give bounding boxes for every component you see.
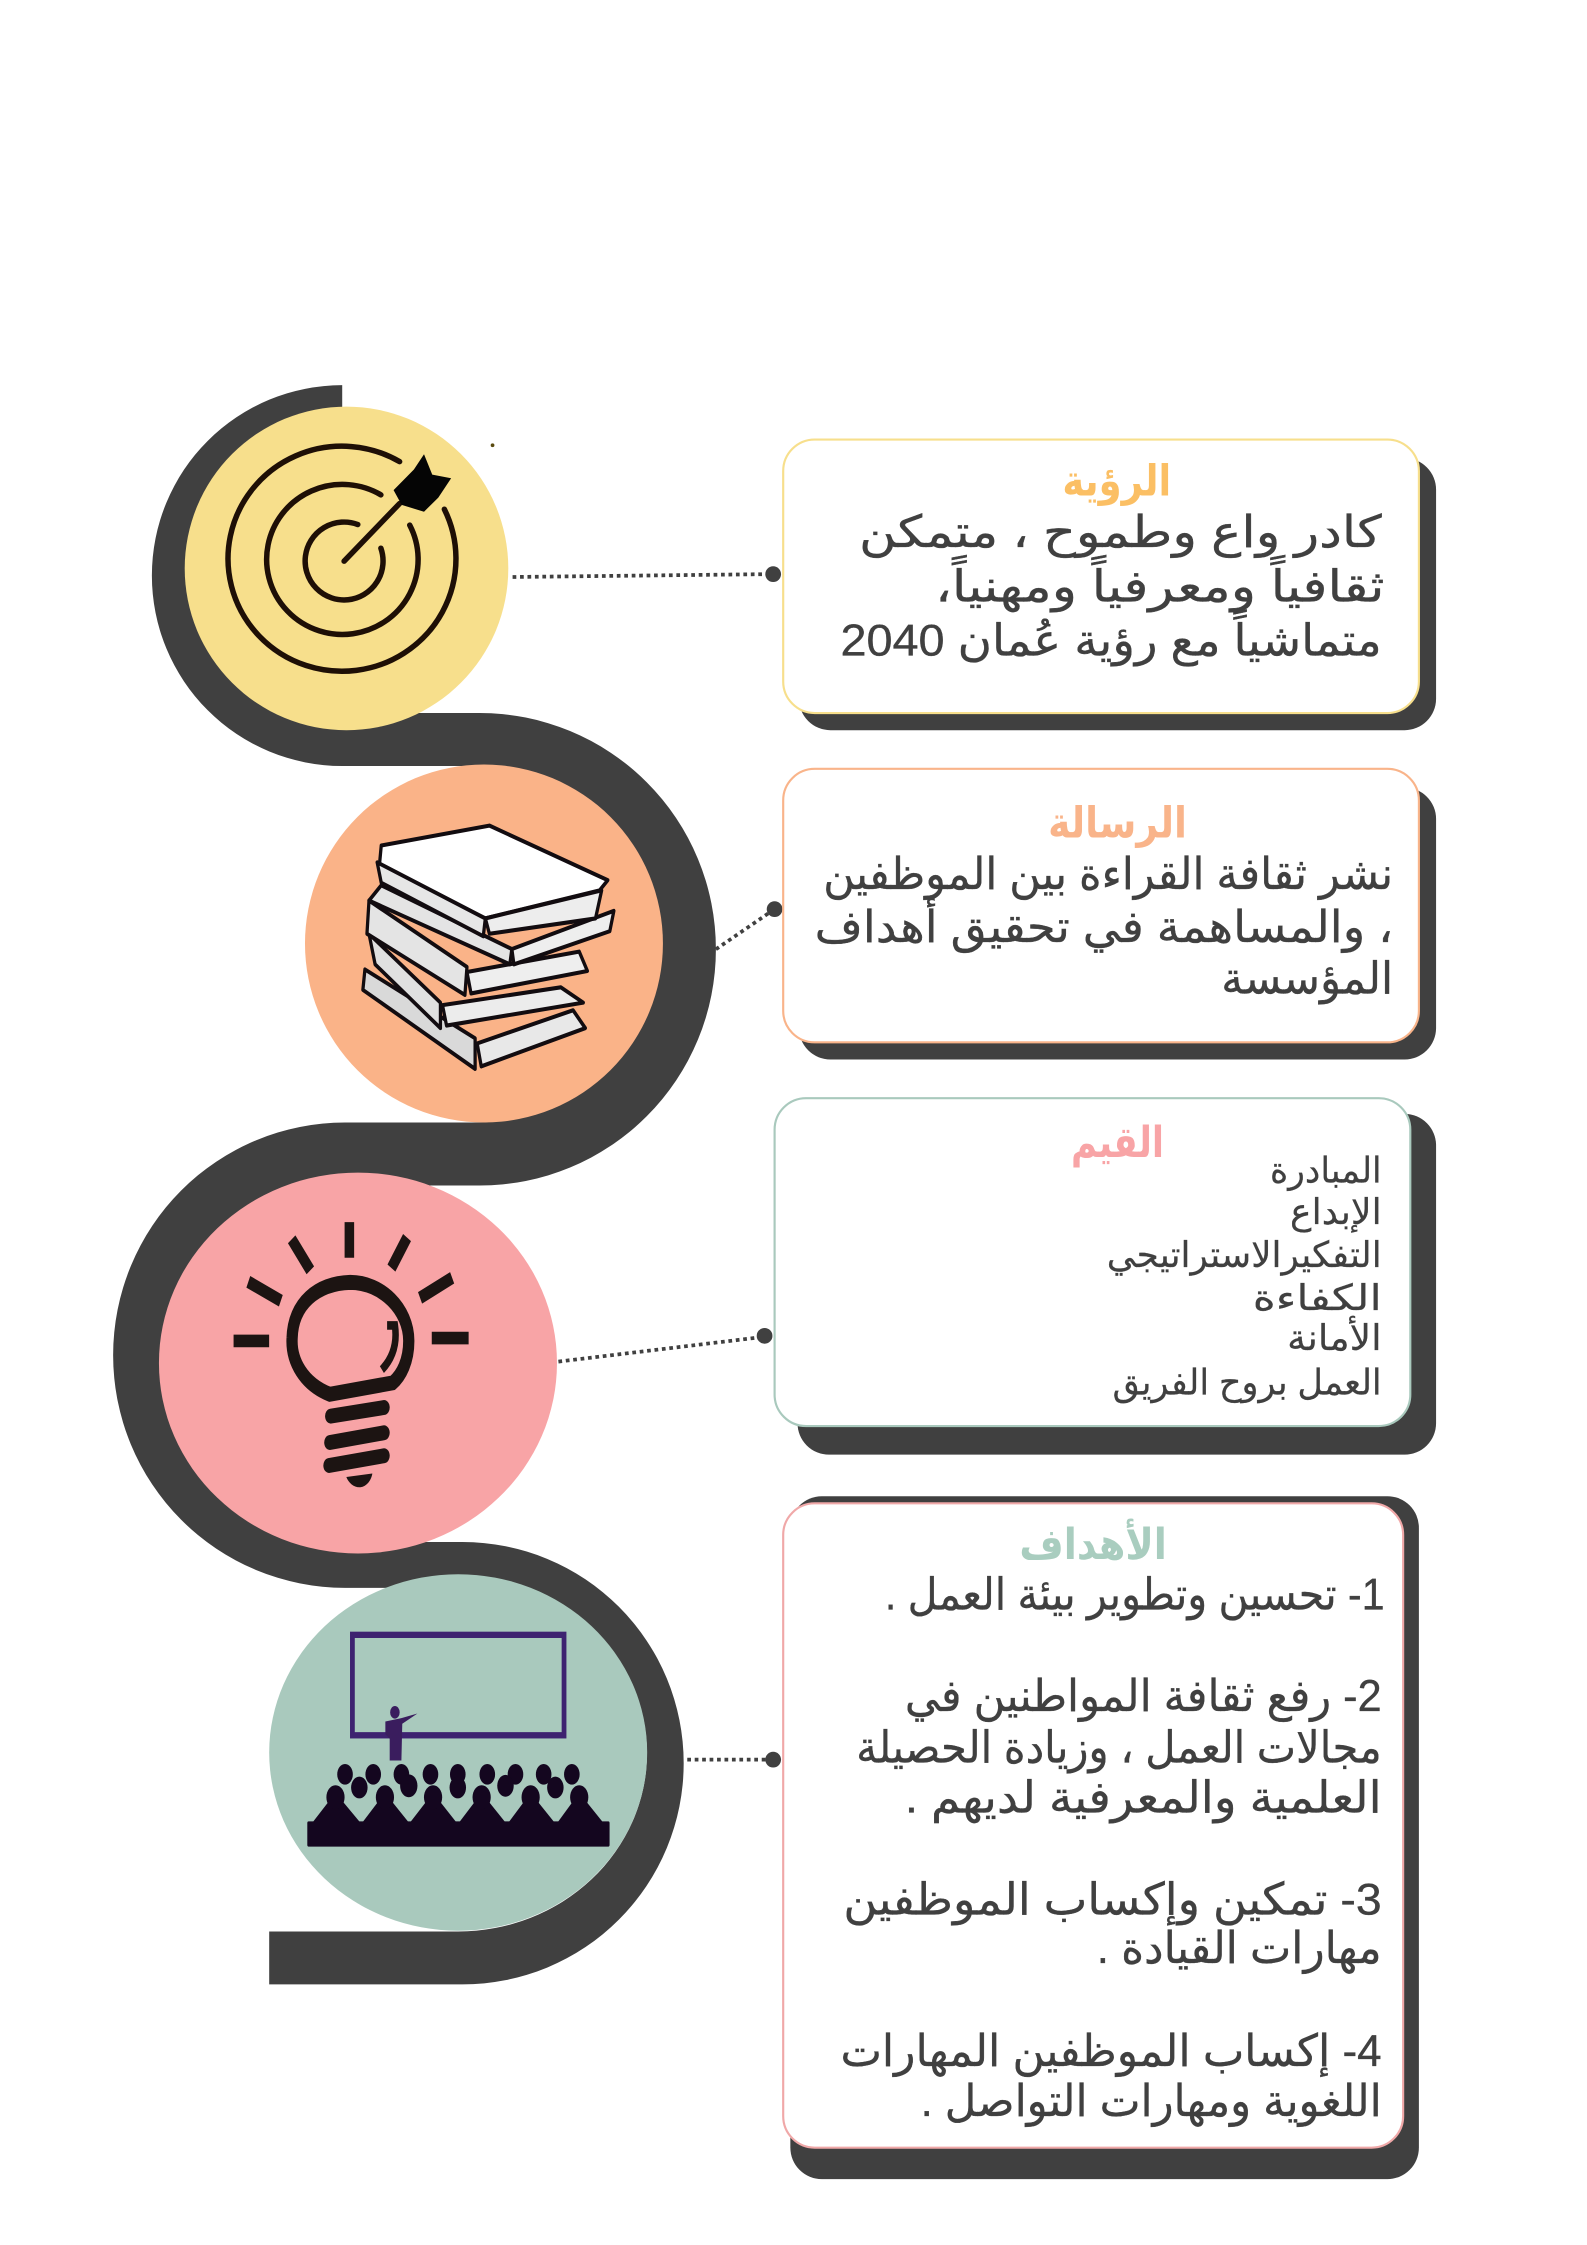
winding road band [113, 385, 716, 1984]
goals list [840, 1570, 1385, 2127]
mission text: ، والمساهمة في تحقيق أهداف [815, 897, 1393, 953]
vision text: ثقافياً ومعرفياً ومهنياً، [935, 555, 1385, 612]
goals list: 4- إكساب الموظفين المهارات [840, 2027, 1382, 2077]
panel: goals [783, 1496, 1419, 2179]
vision text: كادر واع وطموح ، متمكن [859, 508, 1383, 558]
values list [1107, 1151, 1382, 1404]
values list: الكفاءة [1253, 1278, 1382, 1318]
goals list: مجالات العمل ، وزيادة الحصيلة [856, 1723, 1382, 1773]
green circle with presentation icon [269, 1574, 647, 1931]
goals list: مهارات القيادة . [1097, 1924, 1382, 1974]
connector: values [558, 1328, 772, 1362]
heading: vision: الرؤية [1062, 457, 1171, 506]
mission text: نشر ثقافة القراءة بين الموظفين [823, 850, 1393, 900]
values list: الأمانة [1287, 1315, 1382, 1358]
pink circle with light bulb icon [159, 1173, 557, 1553]
values list: العمل بروح الفريق [1112, 1363, 1382, 1404]
panel: mission [783, 769, 1436, 1060]
values list: التفكيرالاستراتيجي [1107, 1235, 1382, 1276]
values list: الإبداع [1290, 1192, 1382, 1233]
vision text: متماشياً مع رؤية عُمان 2040 [840, 609, 1382, 667]
heading: goals: الأهداف [1019, 1518, 1167, 1569]
connector: goals [687, 1752, 781, 1768]
vision text [840, 508, 1385, 667]
panel: vision [783, 440, 1436, 730]
mission text [815, 850, 1393, 1005]
goals list: العلمية والمعرفية لديهم . [905, 1774, 1382, 1824]
connector: vision [513, 566, 781, 582]
heading: mission: الرسالة [1048, 800, 1187, 849]
goals list: 1- تحسين وتطوير بيئة العمل . [885, 1570, 1385, 1620]
connector: mission [716, 901, 782, 949]
goals list: 3- تمكين وإكساب الموظفين [843, 1875, 1382, 1925]
panel: values [775, 1098, 1436, 1455]
heading: values: القيم [1071, 1119, 1164, 1168]
goals list: اللغوية ومهارات التواصل . [921, 2077, 1382, 2127]
values list: المبادرة [1270, 1151, 1382, 1192]
goals list: 2- رفع ثقافة المواطنين في [905, 1672, 1382, 1722]
mission text: المؤسسة [1221, 955, 1393, 1005]
orange circle with books icon [305, 765, 663, 1122]
yellow circle with target icon [185, 407, 508, 730]
